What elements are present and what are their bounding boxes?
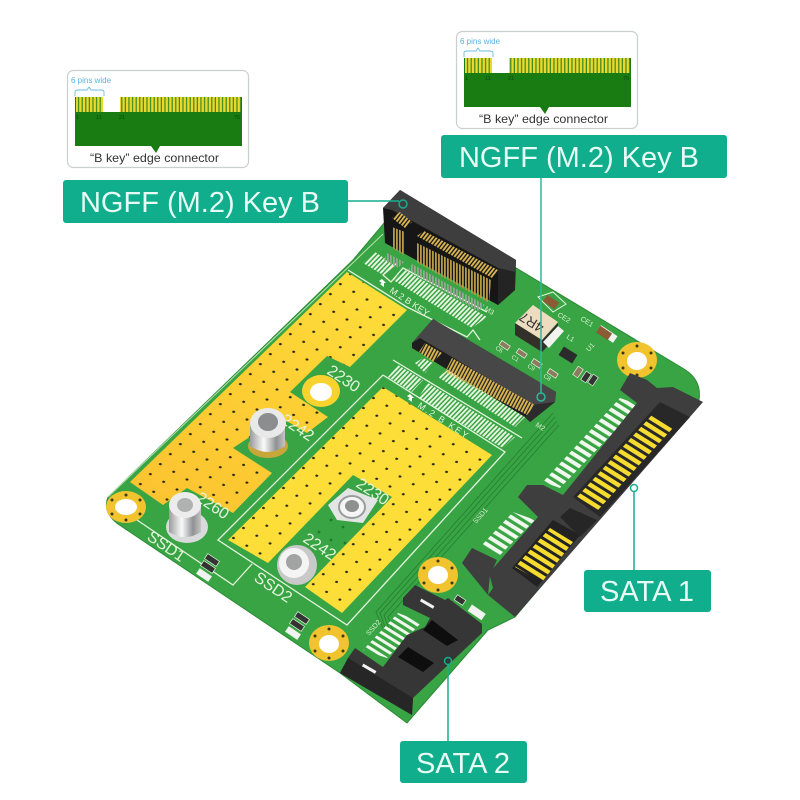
silkscreen labels: SSD2 (251, 569, 295, 607)
inset: left B key edge connector: 6 pins wide (71, 76, 112, 85)
label: SATA 2 (400, 741, 527, 783)
silkscreen labels: 2230 (324, 362, 363, 396)
copper traces (376, 413, 559, 634)
silkscreen labels: SSD1 (472, 507, 490, 525)
leader line: left NGFF label (348, 200, 407, 208)
inset: left B key edge connector: 1 (76, 115, 79, 121)
label: SATA 2: SATA 2 (416, 748, 510, 780)
silkscreen labels: M2 (534, 422, 546, 433)
silkscreen labels: C8 (542, 374, 552, 383)
SATA 2 fingers (363, 613, 422, 658)
standoff: 2242 post (248, 408, 288, 458)
leader line: right NGFF label (537, 178, 545, 401)
silkscreen labels: M.2 B KEY (416, 400, 470, 440)
inset: right B key edge connector: 21 (508, 76, 514, 82)
standoff: 2242 ring (277, 545, 317, 585)
label: right NGFF (M.2) Key B (441, 135, 727, 178)
label: SATA 1 (584, 570, 711, 612)
label: left NGFF (M.2) Key B: NGFF (M.2) Key B (80, 187, 320, 219)
silkscreen labels: 2260 (193, 489, 232, 523)
gold pad: SSD2 (228, 387, 492, 613)
silkscreen labels: U1 (585, 342, 597, 353)
silkscreen labels: 2242 (278, 411, 317, 445)
standoff: 2260 post (166, 492, 208, 543)
silkscreen labels: C6 (494, 346, 504, 355)
gold pad: SSD1 (130, 272, 407, 513)
label: right NGFF (M.2) Key B: NGFF (M.2) Key B (459, 142, 699, 174)
silkscreen connector fingers (363, 252, 525, 448)
inset: left B key edge connector: “B key” edge connector (90, 151, 219, 165)
silkscreen labels (144, 279, 597, 637)
inset: right B key edge connector: 75 (623, 76, 629, 82)
strip dots (318, 519, 346, 544)
mounting holes (106, 342, 657, 661)
inset: right B key edge connector: 1 (465, 76, 468, 82)
inset: left B key edge connector: 11 (96, 115, 102, 121)
inset: right B key edge connector: “B key” edge connector (479, 112, 608, 126)
leader line: SATA 2 label (444, 658, 452, 741)
label: SATA 1: SATA 1 (600, 576, 694, 608)
SMD components (197, 292, 618, 639)
board top edge highlight (108, 234, 383, 497)
silkscreen labels: C1 (510, 355, 520, 364)
circuit board (106, 190, 703, 723)
silkscreen labels: 2242 (300, 530, 339, 564)
SATA 1 fingers (482, 398, 640, 555)
silkscreen labels: 2230 (353, 475, 392, 509)
silkscreen labels: M.2 B KEY (388, 285, 431, 318)
silkscreen labels: L1 (565, 334, 575, 344)
inductor 4R7 (515, 305, 564, 352)
inset: right B key edge connector: 6 pins wide (460, 37, 501, 46)
silkscreen labels: SSD1 (144, 528, 188, 566)
silkscreen labels: CE2 (556, 312, 571, 325)
M3 connector (383, 190, 516, 311)
label: left NGFF (M.2) Key B (63, 180, 348, 223)
M2 connector (412, 319, 556, 422)
inset: right B key edge connector: 11 (485, 76, 491, 82)
silkscreen labels: SSD2 (365, 619, 383, 637)
inset: right B key edge connector (456, 32, 638, 128)
board surface (106, 210, 699, 723)
silkscreen labels: CE1 (579, 316, 594, 329)
SATA 2 connector (340, 585, 482, 715)
silkscreen labels: M3 (483, 306, 495, 317)
silkscreen labels: C9 (526, 364, 536, 373)
inductor 4R7: 4R7 (516, 309, 547, 336)
leader line: SATA 1 label (630, 484, 638, 570)
inset: left B key edge connector: 75 (234, 115, 240, 121)
silkscreen outlines (137, 263, 522, 625)
SATA 1 connector (462, 373, 703, 617)
standoff: hex nut (328, 488, 378, 523)
inset: left B key edge connector (68, 70, 248, 168)
inset: left B key edge connector: 21 (119, 115, 125, 121)
